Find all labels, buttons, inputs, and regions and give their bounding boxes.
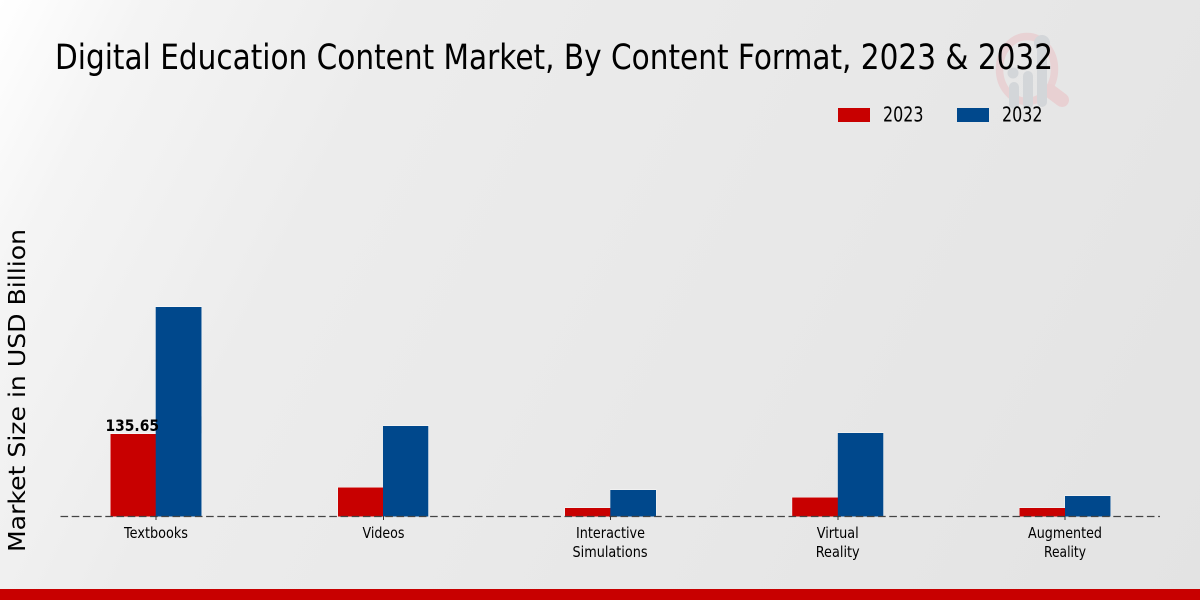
category: Videos [338, 425, 429, 542]
category: Textbooks [106, 306, 202, 542]
legend [838, 102, 1042, 126]
icon: watermark logo [1000, 35, 1062, 104]
category: Augmented Reality [1019, 495, 1111, 561]
category: Augmented Reality: Augmented [1028, 524, 1102, 542]
category: Virtual Reality [792, 432, 884, 561]
legend item: 2032 [957, 102, 1042, 126]
legend item: 2023 [838, 102, 924, 126]
category: Virtual Reality: Reality [816, 543, 860, 561]
footer bar [0, 589, 1200, 600]
value label: 135.65 [106, 416, 159, 435]
category: Videos: Videos [362, 524, 404, 542]
legend item: 2023: 2023 [883, 102, 924, 126]
category: Interactive Simulations: Interactive [576, 524, 645, 542]
legend item: 2032: 2032 [1002, 102, 1042, 126]
category: Interactive Simulations: Simulations [572, 543, 648, 561]
category: Augmented Reality: Reality [1044, 543, 1086, 561]
category: Textbooks: Textbooks [123, 524, 188, 542]
y-axis label: Market Size in USD Billion [5, 229, 31, 552]
category: Virtual Reality: Virtual [817, 524, 859, 542]
bar chart [106, 306, 1111, 561]
category: Interactive Simulations [564, 489, 656, 561]
